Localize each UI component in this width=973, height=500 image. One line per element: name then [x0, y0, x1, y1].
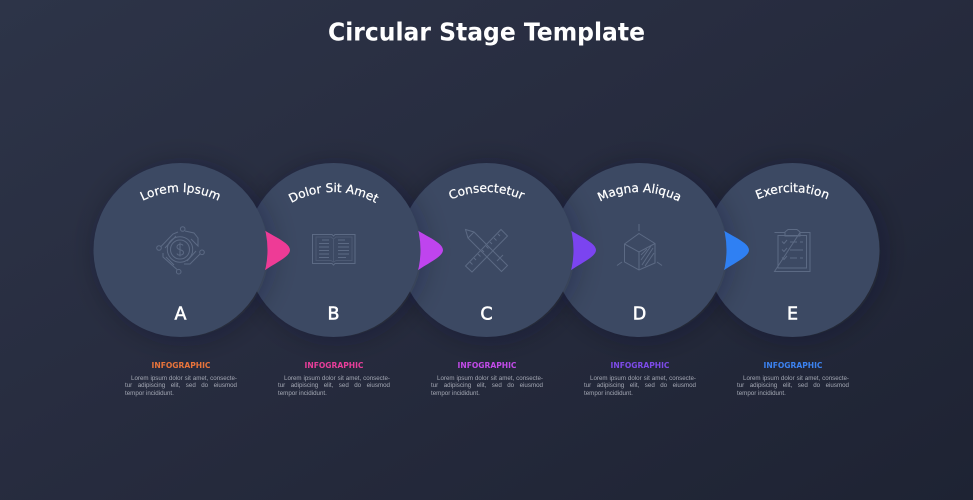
stage letter C: C — [480, 304, 493, 324]
shadow of stage E — [711, 167, 881, 337]
stage letter E: E — [787, 304, 798, 324]
stage D curved heading: Magna Aliqua — [597, 183, 680, 202]
description C — [431, 375, 543, 397]
description B — [278, 375, 390, 397]
description D — [584, 375, 696, 397]
stage letter D: D — [633, 304, 646, 324]
stage A curved heading: Lorem Ipsum — [140, 183, 220, 200]
shadow of stage A — [99, 167, 269, 337]
arrow D to E — [717, 225, 749, 277]
description E: tempor incididunt. — [737, 390, 786, 397]
stage D circle — [552, 163, 726, 337]
description D: Lorem ipsum dolor sit amet, consecte- — [590, 375, 696, 382]
stage A circle — [94, 163, 268, 337]
stage B curved heading: Dolor Sit Amet — [288, 182, 379, 204]
stage C circle — [400, 163, 574, 337]
description E: Lorem ipsum dolor sit amet, consecte- — [743, 375, 849, 382]
shadow of stage B — [252, 167, 422, 337]
description D: tur adipiscing elit, sed do eiusmod — [584, 382, 696, 389]
description E — [737, 375, 849, 397]
stage letter B: B — [327, 304, 340, 324]
icon: crossed pencil and ruler — [466, 230, 508, 272]
caption D: INFOGRAPHIC — [611, 361, 669, 370]
description C: tempor incididunt. — [431, 390, 480, 397]
arrow C to D — [564, 225, 596, 277]
arrow B to C — [411, 225, 443, 277]
description B: Lorem ipsum dolor sit amet, consecte- — [284, 375, 390, 382]
arrow A to B — [258, 225, 290, 277]
description C: Lorem ipsum dolor sit amet, consecte- — [437, 375, 543, 382]
icon: dollar coin network — [157, 227, 204, 274]
icon: clipboard checklist — [774, 230, 810, 272]
shadow of stage D — [558, 167, 728, 337]
caption C: INFOGRAPHIC — [458, 361, 516, 370]
description B: tempor incididunt. — [278, 390, 327, 397]
stage letter A: A — [175, 304, 187, 324]
stage E circle — [706, 163, 880, 337]
shadow of stage C — [405, 167, 575, 337]
stage C curved heading: Consectetur — [449, 184, 525, 199]
description D: tempor incididunt. — [584, 390, 633, 397]
caption A: INFOGRAPHIC — [152, 361, 210, 370]
caption E: INFOGRAPHIC — [764, 361, 822, 370]
description B: tur adipiscing elit, sed do eiusmod — [278, 382, 390, 389]
description A — [125, 375, 237, 397]
description E: tur adipiscing elit, sed do eiusmod — [737, 382, 849, 389]
caption B: INFOGRAPHIC — [305, 361, 363, 370]
title: Circular Stage Template — [328, 18, 645, 46]
icon: open book — [312, 234, 355, 265]
stage B circle — [246, 163, 420, 337]
description A: Lorem ipsum dolor sit amet, consecte- — [131, 375, 237, 382]
stage E curved heading: Exercitation — [755, 182, 828, 200]
icon: shaded cube — [617, 224, 662, 270]
description C: tur adipiscing elit, sed do eiusmod — [431, 382, 543, 389]
description A: tur adipiscing elit, sed do eiusmod — [125, 382, 237, 389]
description A: tempor incididunt. — [125, 390, 174, 397]
